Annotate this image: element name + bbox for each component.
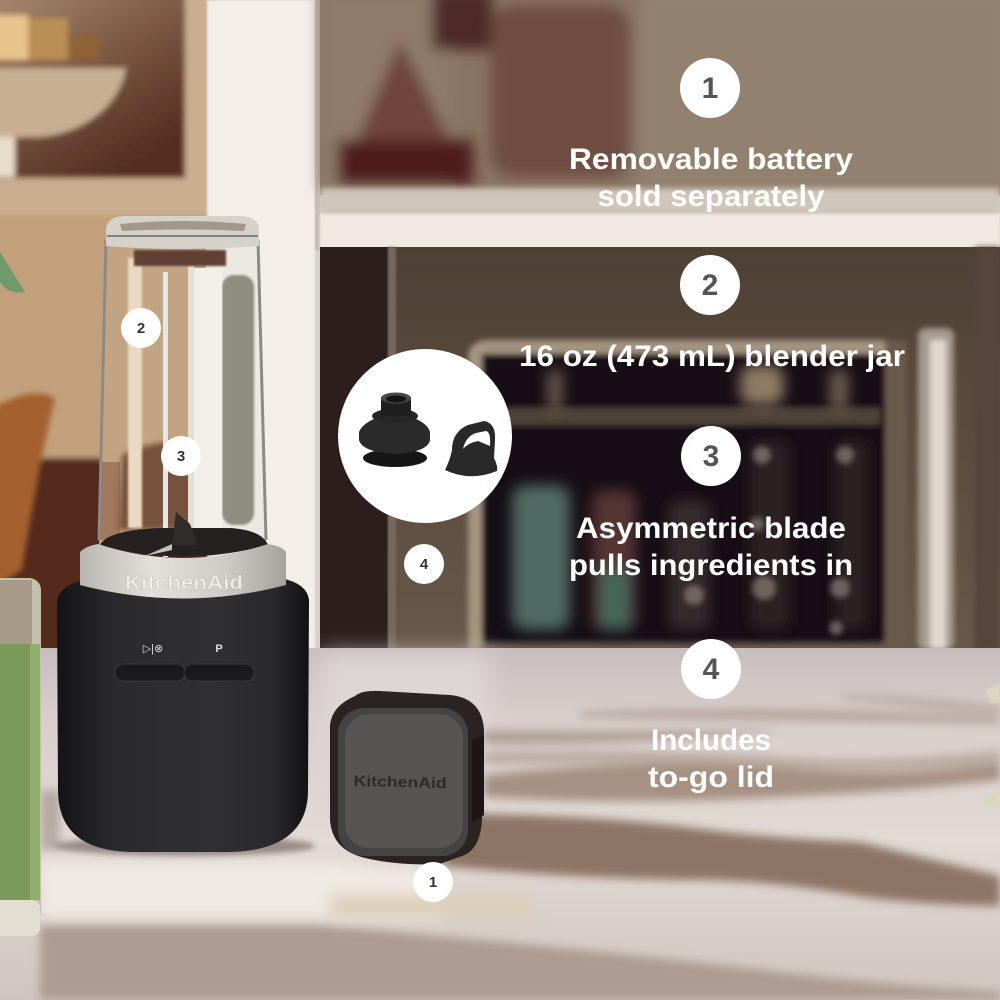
green smoothie glass xyxy=(0,578,41,936)
feature 4: to-go lid xyxy=(648,761,774,794)
control buttons xyxy=(115,643,254,681)
marker 1 by battery xyxy=(413,862,453,902)
wine fridge window xyxy=(468,340,890,650)
feature 3: Asymmetric blade xyxy=(576,512,846,545)
feature 4: 4 xyxy=(703,653,720,686)
accessory circle with lid parts xyxy=(338,349,512,523)
white shelf xyxy=(320,188,1000,216)
counter xyxy=(0,648,1000,1000)
marker 4 by lid xyxy=(404,544,444,584)
leaf xyxy=(0,252,25,293)
blender base xyxy=(57,578,309,852)
feature 1: Removable battery xyxy=(569,143,853,176)
metal ring with logo xyxy=(80,544,286,598)
glass jar xyxy=(99,216,268,557)
battery pack xyxy=(330,691,484,864)
blade and jar base xyxy=(100,528,268,556)
counter shadows xyxy=(40,695,1000,1000)
marker 2 on jar: 2 xyxy=(137,320,145,337)
feature 4: Includes xyxy=(651,724,771,757)
feature 1 xyxy=(569,58,853,213)
feature 2 xyxy=(519,255,905,373)
jar interior tones xyxy=(99,240,206,545)
feature 2: 16 oz (473 mL) blender jar xyxy=(519,340,905,373)
blade collar part xyxy=(359,392,430,467)
feature 3: pulls ingredients in xyxy=(569,549,853,582)
feature 1: sold separately xyxy=(598,180,825,213)
feature 3 xyxy=(569,426,853,582)
marker 3 on jar: 3 xyxy=(177,448,185,465)
marker 3 on jar xyxy=(161,436,201,476)
marker 1 by battery: 1 xyxy=(429,874,437,891)
orange chair blur xyxy=(0,394,55,590)
cabinet xyxy=(320,247,1000,652)
to-go cap xyxy=(445,421,497,476)
metal ring with logo: KitchenAid xyxy=(125,573,243,594)
feature 1: 1 xyxy=(702,72,718,105)
feature 4 xyxy=(648,639,774,794)
control buttons: ▷|⊗ xyxy=(143,643,163,655)
battery pack: KitchenAid xyxy=(353,773,447,792)
feature 3: 3 xyxy=(703,440,719,473)
marker 4 by lid: 4 xyxy=(420,556,429,573)
jar rim xyxy=(106,216,259,249)
blender shadow xyxy=(55,836,315,856)
plant on right edge xyxy=(980,684,1000,806)
feature 2: 2 xyxy=(702,269,718,302)
marker 2 on jar xyxy=(121,308,161,348)
blender xyxy=(55,216,315,856)
control buttons: P xyxy=(215,643,223,655)
upper right wall xyxy=(320,0,1000,195)
